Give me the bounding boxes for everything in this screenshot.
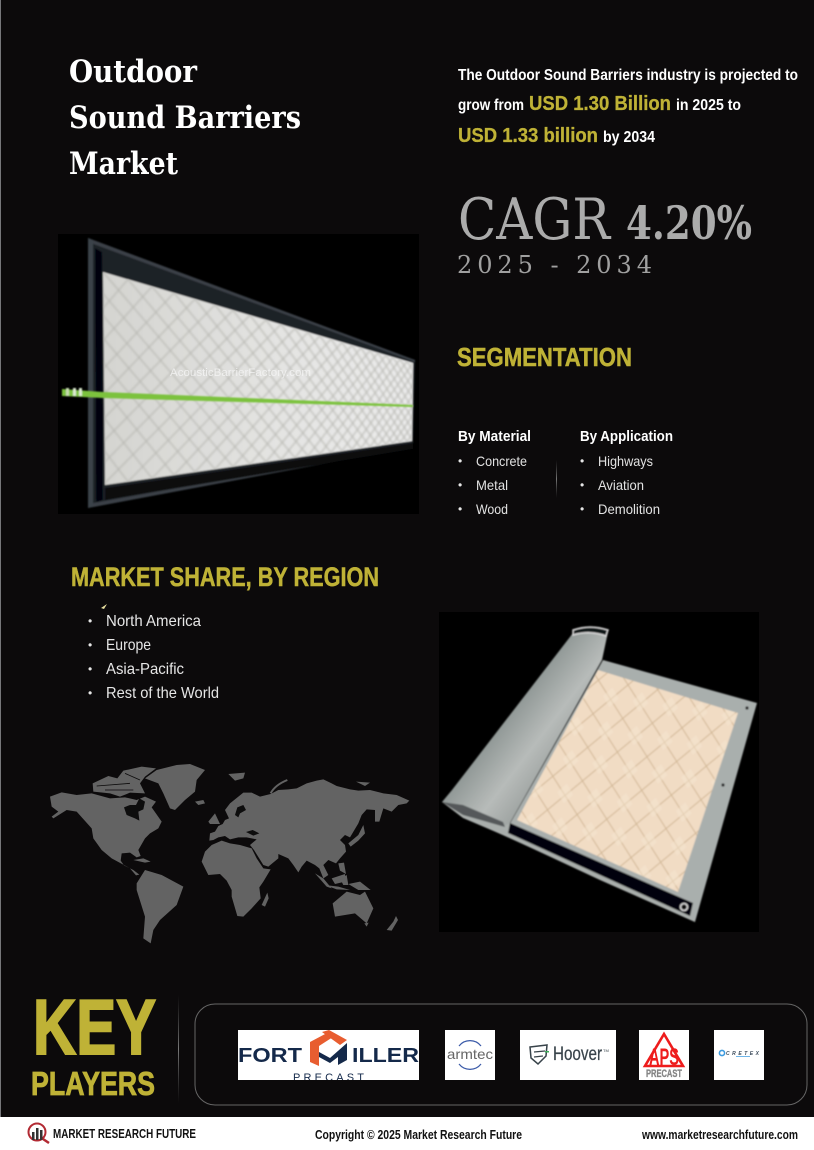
market projection text: in 2025 to (676, 97, 741, 114)
segment list: by material: • (458, 478, 462, 492)
segment list: by material: • (458, 454, 462, 468)
region list: Rest of the World (106, 685, 219, 702)
logo: APS Precast (639, 1030, 689, 1080)
key players panel (195, 1004, 807, 1105)
key players heading: PLAYERS (31, 1065, 155, 1102)
region list: • (88, 638, 92, 652)
logo: Fort Miller Precast: PRECAST (293, 1072, 364, 1084)
key players heading (31, 983, 156, 1102)
logo: Cretex (714, 1030, 764, 1080)
segment list: by application: By Application (580, 428, 673, 445)
logo: Armtec: armtec (447, 1046, 493, 1062)
region list: North America (106, 613, 201, 630)
segment list: by material: Concrete (476, 453, 527, 469)
segment list: by application: • (580, 478, 584, 492)
photo: quilted sound barrier panel in perspective (58, 234, 419, 514)
segment list: by material: By Material (458, 428, 531, 445)
logo: Hoover (520, 1030, 616, 1080)
segment list: by application: Aviation (598, 477, 644, 493)
market projection text: by 2034 (603, 129, 655, 146)
segment list: by material: • (458, 502, 462, 516)
CAGR figure: 4.20% (626, 196, 752, 250)
photo: rolled barrier blanket (439, 612, 759, 932)
region list: Europe (106, 637, 151, 654)
title: Market (69, 146, 179, 182)
logo: Fort Miller Precast: ILLER (352, 1045, 420, 1067)
CAGR figure: CAGR (458, 187, 612, 253)
segment list: by application (580, 428, 673, 517)
footer bar (0, 1117, 814, 1150)
footer brand: MARKET RESEARCH FUTURE (53, 1126, 196, 1141)
logo: Armtec (445, 1030, 495, 1080)
logo: APS Precast: APS (649, 1044, 679, 1071)
segment list: by application: Demolition (598, 501, 660, 517)
logo: Hoover: Hoover (553, 1044, 603, 1065)
market projection text: grow from (458, 97, 524, 114)
logo: APS Precast: PRECAST (646, 1068, 682, 1080)
region list: • (88, 662, 92, 676)
market projection text: USD 1.30 Billion (529, 92, 671, 115)
segment list: by material (458, 428, 531, 517)
key players heading: KEY (33, 983, 156, 1071)
title: Sound Barriers (69, 100, 301, 136)
title (69, 54, 301, 182)
world map (50, 764, 409, 943)
footer copyright: Copyright © 2025 Market Research Future (315, 1127, 522, 1142)
segment list: by application: • (580, 454, 584, 468)
market projection text (458, 67, 798, 147)
CAGR figure (457, 187, 752, 279)
region list: • (88, 614, 92, 628)
logo: Cretex: CRETEX (726, 1051, 760, 1057)
photo: quilted sound barrier panel in perspective: AcousticBarrierFactory.com (170, 367, 311, 379)
footer logo icon (28, 1124, 49, 1143)
heading: segmentation: SEGMENTATION (457, 342, 632, 372)
title: Outdoor (69, 54, 198, 90)
segment list: by material: Metal (476, 477, 508, 493)
region list: Asia-Pacific (106, 661, 184, 678)
segment list: by application: • (580, 502, 584, 516)
heading: market share by region: MARKET SHARE, BY REGION (71, 562, 379, 592)
region list (88, 604, 219, 702)
logo: Hoover: TM (603, 1048, 609, 1053)
segment list: by application: Highways (598, 453, 653, 469)
region list: • (88, 686, 92, 700)
market projection text: USD 1.33 billion (458, 124, 598, 147)
segment list: by material: Wood (476, 501, 508, 517)
logo: Fort Miller Precast: FORT (238, 1045, 302, 1067)
logo: Fort Miller Precast (238, 1030, 420, 1084)
CAGR figure: 2025 - 2034 (457, 251, 652, 279)
